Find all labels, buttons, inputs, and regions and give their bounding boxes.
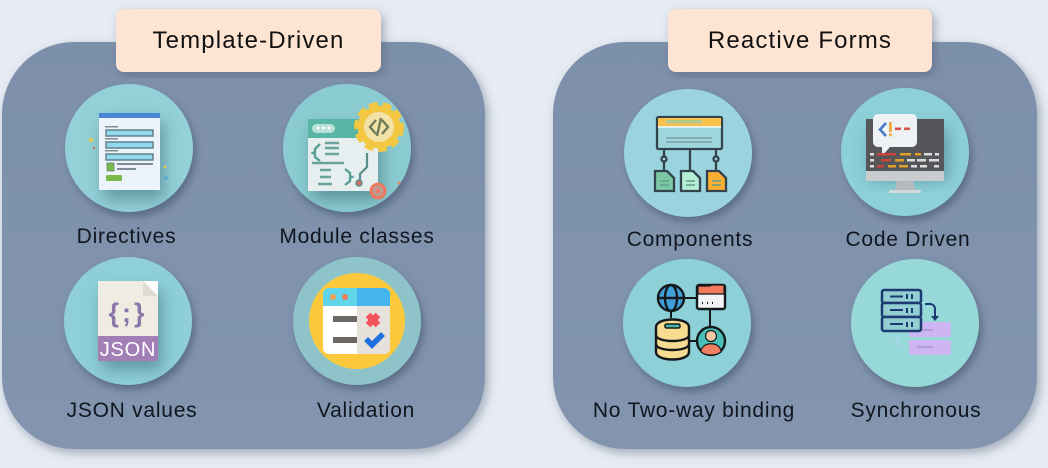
icon: component tree [655,117,726,191]
item: synchronous [851,259,981,422]
heading: template-driven [116,9,381,72]
icon: servers syncing [882,290,951,355]
heading: reactive forms [668,9,932,72]
panel: template-driven [2,9,485,449]
item: json values [64,257,197,422]
label: No Two-way binding [593,399,795,422]
icon: json file: {;} [108,298,148,328]
label: Synchronous [851,399,981,422]
panel: reactive forms [553,9,1037,449]
icon: json file [98,281,158,361]
item: directives [65,84,193,248]
label: JSON values [67,399,197,422]
icon: checklist window [323,288,390,354]
item: code driven [841,88,970,251]
item: module classes [279,84,435,248]
label: Directives [77,225,176,248]
heading: template-driven: Template-Driven [153,27,344,54]
heading: reactive forms: Reactive Forms [708,27,892,54]
label: Code Driven [846,228,970,251]
item: no two-way binding [593,259,795,422]
label: Module classes [279,225,435,248]
icon: json file: JSON [100,339,156,361]
label: Components [627,228,753,251]
icon: code module with gear [308,104,402,198]
item: validation [293,257,421,422]
item: components [624,89,753,251]
icon: form [99,113,160,190]
icon: monitor with code [866,114,944,193]
icon: network of globe, window, database, user [656,285,725,360]
label: Validation [317,399,415,422]
